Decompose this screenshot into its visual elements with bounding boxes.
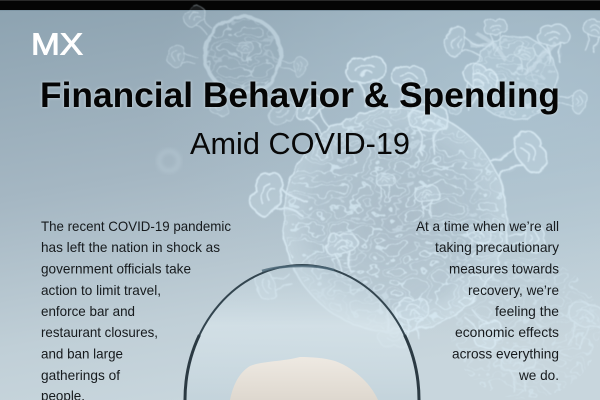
dome interior <box>185 265 419 400</box>
text block: right paragraph: economic effects <box>455 324 559 340</box>
virus illustration: upper right particle <box>442 17 600 120</box>
text block: right paragraph: measures towards <box>449 260 559 276</box>
title: Financial Behavior & Spending <box>40 76 560 115</box>
text block: left paragraph: action to limit travel, <box>41 282 161 298</box>
virus illustration: upper left particle <box>166 3 307 129</box>
dome lower right thick edge <box>405 335 419 400</box>
piggy bank <box>230 357 378 400</box>
text block: right paragraph: we do. <box>518 367 559 383</box>
text block: right paragraph: recovery, we’re <box>468 282 559 298</box>
text block: right paragraph: At a time when we’re all <box>416 218 559 234</box>
text block: left paragraph: has left the nation in shock as <box>41 239 220 255</box>
text block: right paragraph <box>416 218 559 383</box>
virus illustration: small faint particle <box>159 151 179 171</box>
text block: right paragraph: across everything <box>452 346 559 362</box>
text block: left paragraph: enforce bar and <box>41 303 135 319</box>
top black bar <box>0 0 600 11</box>
glass dome with piggy bank <box>185 265 419 400</box>
logo: MX: MX <box>31 26 83 62</box>
text block: right paragraph: taking precautionary <box>435 239 559 255</box>
title: Financial Behavior & Spending <box>40 76 560 115</box>
dome top highlight <box>262 266 334 271</box>
virus illustration: lower right particle <box>450 257 600 399</box>
dome lower left thick edge <box>185 335 199 400</box>
subtitle: Amid COVID-19 <box>190 126 410 161</box>
text block: left paragraph <box>41 218 231 400</box>
text block: left paragraph: restaurant closures, <box>41 324 158 340</box>
text block: right paragraph: feeling the <box>495 303 559 319</box>
text block: left paragraph: and ban large <box>41 346 123 362</box>
text block: left paragraph: gatherings of <box>41 367 120 383</box>
text block: left paragraph: government officials take <box>41 260 191 276</box>
text block: left paragraph: The recent COVID-19 pandemic <box>41 218 231 234</box>
virus illustration: large particle <box>246 53 552 353</box>
dome outline <box>185 265 419 400</box>
